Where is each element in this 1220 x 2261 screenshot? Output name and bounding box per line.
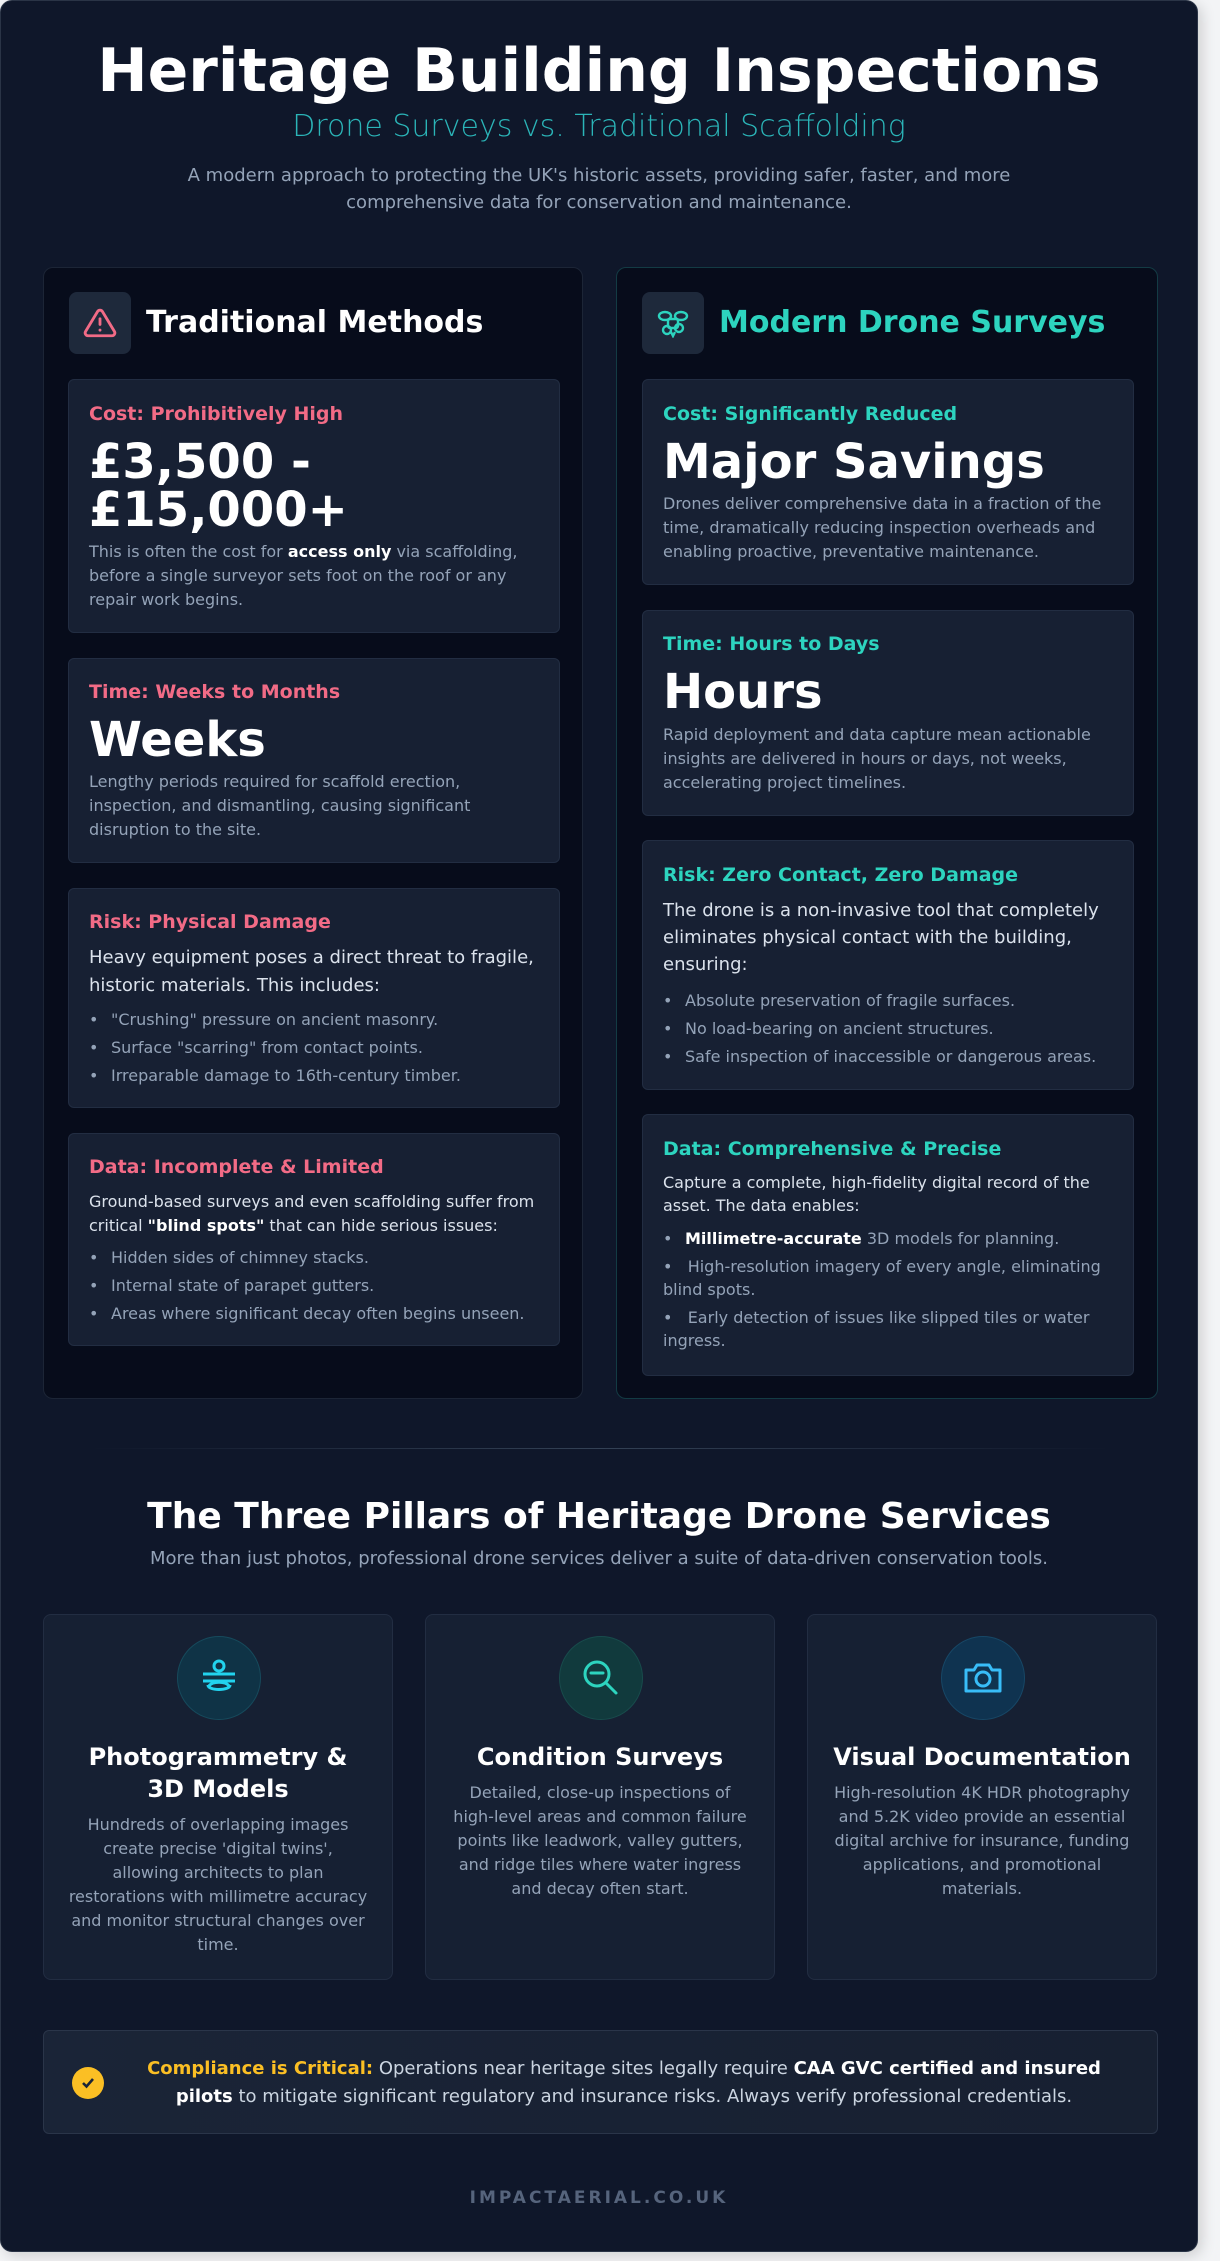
icon: camera — [941, 1636, 1025, 1720]
heading: Traditional Methods — [146, 305, 483, 340]
card: data — [642, 1114, 1134, 1376]
pillar title — [89, 1743, 347, 1803]
pillar text: High-resolution 4K HDR photography and 5.2K video provide an essential digital archive for insurance, funding applications, and promotional materials. — [834, 1783, 1130, 1898]
card: time: Time: Hours to Days — [663, 633, 880, 655]
card: risk: "Crushing" pressure on ancient masonry. — [111, 1010, 438, 1029]
pillar title: Visual Documentation — [833, 1743, 1131, 1771]
callout: compliance — [43, 2030, 1158, 2134]
pillar text: Hundreds of overlapping images create precise 'digital twins', allowing architects to plan restorations with millimetre accuracy and monitor structural changes over time. — [69, 1815, 367, 1954]
card: time — [68, 658, 560, 863]
panel: modern drone surveys — [616, 267, 1158, 1399]
icon: magnifier — [559, 1636, 643, 1720]
pillar title: Photogrammetry & — [89, 1743, 347, 1771]
pillar text: Detailed, close-up inspections of high-level areas and common failure points like leadwork, valley gutters, and ridge tiles where water ingress and decay often start. — [453, 1783, 747, 1898]
section heading: three pillars: The Three Pillars of Heritage Drone Services — [147, 1496, 1051, 1537]
card: risk — [642, 840, 1134, 1090]
card: time — [642, 610, 1134, 816]
heading: Modern Drone Surveys — [719, 305, 1105, 340]
card: cost: Major Savings — [663, 434, 1045, 490]
pillar title: Condition Surveys — [477, 1743, 723, 1771]
card: time: Hours — [663, 664, 823, 720]
card: data: • High-resolution imagery of every angle, eliminating blind spots. — [663, 1257, 1101, 1299]
pillar title: 3D Models — [147, 1775, 289, 1803]
card: risk: Risk: Zero Contact, Zero Damage — [663, 864, 1018, 886]
card: cost — [68, 379, 560, 633]
icon: check — [72, 2067, 104, 2099]
pillar: condition surveys — [425, 1614, 775, 1980]
card: cost: £15,000+ — [89, 482, 348, 538]
icon: warning — [69, 292, 131, 354]
card: time: Lengthy periods required for scaffold erection, inspection, and dismantling, causing significant disruption to the site. — [89, 772, 470, 839]
card: data: Ground-based surveys and even scaffolding suffer from critical "blind spots" that can hide serious issues: — [89, 1192, 534, 1235]
footer: IMPACTAERIAL.CO.UK — [470, 2188, 728, 2208]
pillar: photogrammetry — [43, 1614, 393, 1980]
card: cost: Cost: Significantly Reduced — [663, 403, 957, 425]
subtitle: Drone Surveys vs. Traditional Scaffolding — [292, 109, 906, 144]
card: risk: Absolute preservation of fragile surfaces. — [685, 991, 1015, 1010]
intro text: A modern approach to protecting the UK's historic assets, providing safer, faster, and more comprehensive data for conservation and maintenance. — [188, 165, 1010, 213]
card: data: Millimetre-accurate 3D models for planning. — [685, 1229, 1059, 1248]
card: data: Internal state of parapet gutters. — [111, 1276, 374, 1295]
card: time: Rapid deployment and data capture mean actionable insights are delivered in hours or days, not weeks, accelerating project timelines. — [663, 725, 1091, 792]
card: cost: This is often the cost for access only via scaffolding, before a single surveyor sets foot on the roof or any repair work begins. — [89, 542, 517, 609]
card: data: Data: Comprehensive & Precise — [663, 1138, 1001, 1160]
card: time: Weeks — [89, 712, 266, 768]
card: risk: Irreparable damage to 16th-century timber. — [111, 1066, 461, 1085]
icon: drone — [642, 292, 704, 354]
card: data: Hidden sides of chimney stacks. — [111, 1248, 369, 1267]
card: data: • Early detection of issues like slipped tiles or water ingress. — [663, 1308, 1089, 1350]
pillar: visual documentation — [807, 1614, 1157, 1980]
card: risk — [68, 888, 560, 1108]
card: risk: The drone is a non-invasive tool that completely eliminates physical contact with the building, ensuring: — [663, 900, 1099, 975]
card: time: Time: Weeks to Months — [89, 681, 340, 703]
card: risk: Heavy equipment poses a direct threat to fragile, historic materials. This includes: — [89, 947, 534, 996]
card: cost: £3,500 - — [89, 434, 311, 490]
card: cost — [642, 379, 1134, 585]
card: risk: No load-bearing on ancient structures. — [685, 1019, 994, 1038]
callout text: Compliance is Critical: Operations near heritage sites legally require CAA GVC certified and insured pilots to mitigate significant regulatory and insurance risks. Always verify professional credentials. — [147, 2058, 1101, 2107]
card: risk: Risk: Physical Damage — [89, 911, 331, 933]
panel: traditional methods — [43, 267, 583, 1399]
title: Heritage Building Inspections — [97, 36, 1101, 106]
card: cost: Drones deliver comprehensive data in a fraction of the time, dramatically reducing inspection overheads and enabling proactive, preventative maintenance. — [663, 494, 1101, 561]
card: data: Capture a complete, high-fidelity digital record of the asset. The data enables: — [663, 1173, 1090, 1215]
card: risk: Surface "scarring" from contact points. — [111, 1038, 423, 1057]
icon: 3d model — [177, 1636, 261, 1720]
card: data: Data: Incomplete & Limited — [89, 1156, 384, 1178]
card: data — [68, 1133, 560, 1346]
card: data: Areas where significant decay often begins unseen. — [111, 1304, 525, 1323]
section subtitle: More than just photos, professional drone services deliver a suite of data-driven conservation tools. — [150, 1548, 1048, 1569]
card: cost: Cost: Prohibitively High — [89, 403, 343, 425]
card: risk: Safe inspection of inaccessible or dangerous areas. — [685, 1047, 1096, 1066]
